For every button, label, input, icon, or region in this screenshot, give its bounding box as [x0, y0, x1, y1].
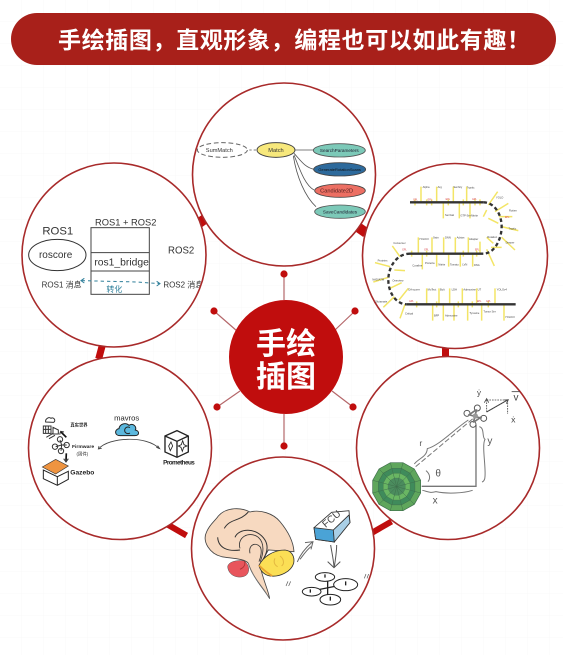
panel: drone tracking geometry sketch [356, 356, 540, 540]
pathway labels: Rotation [487, 235, 498, 239]
pathway labels: BFP [434, 314, 439, 318]
bridge stack: ROS1 + ROS2 [95, 217, 156, 227]
red markers: EPL [428, 200, 433, 202]
central hub: hand-drawn illustrations [229, 300, 343, 414]
red markers: EPL [477, 301, 482, 303]
yellow label ticks [373, 187, 518, 321]
flow arrows [249, 150, 316, 207]
Gazebo box [42, 459, 94, 485]
pathway labels: Deeper [506, 240, 514, 244]
pathway labels: Ser/Gly [453, 185, 463, 189]
mavros cloud: mavros [114, 413, 139, 422]
red markers: EPL [409, 301, 414, 303]
central hub: hand-drawn illustrations: 插图 [256, 361, 316, 394]
excitement marks [286, 574, 369, 586]
node: SumMatch [197, 143, 247, 157]
panel: serpentine pathway diagram [362, 164, 548, 348]
arrow to drone [328, 545, 340, 568]
pathway labels: Swin [433, 236, 439, 240]
red markers: EPL [486, 301, 491, 303]
Prometheus cube [163, 431, 195, 467]
node: Match [257, 143, 295, 157]
pathway labels: Overview [392, 279, 403, 283]
central hub: hand-drawn illustrations: 手绘 [256, 328, 316, 361]
pathway labels: Glutamate [375, 300, 388, 304]
node: Match: Match [268, 148, 284, 154]
ROS2 label: ROS2 [168, 245, 194, 256]
Firmware label: (固件) [77, 450, 89, 457]
panel: ROS1 and ROS2 bridge sketch [22, 163, 206, 347]
red markers: EPL [402, 250, 407, 252]
message conversion arrow [42, 278, 203, 294]
bridge stack [91, 217, 156, 294]
pathway labels: Nitrite [471, 214, 478, 218]
red markers: EPL [475, 250, 480, 252]
green wheel target [373, 463, 421, 511]
hub spokes and dots [210, 270, 359, 450]
ROS1 roscore bubble: roscore [39, 250, 73, 261]
panel: mavros simulation sketch [28, 356, 212, 540]
pathway labels: LDH [452, 287, 457, 291]
pathway labels: Adrian [457, 236, 465, 240]
bridge stack: ros1_bridge [94, 257, 149, 268]
red markers [402, 199, 510, 303]
geometry labels [419, 436, 492, 506]
real world sketch [43, 418, 88, 439]
red markers: EPL [472, 199, 477, 201]
node: SaveCandidates [315, 205, 365, 218]
pathway labels: Proteins [425, 261, 435, 265]
title banner: 手绘插图，直观形象，编程也可以如此有趣！ [58, 27, 530, 53]
pathway labels: LVN [462, 262, 467, 266]
mavros cloud [114, 413, 139, 436]
pathway labels: Dif-scorer [408, 287, 420, 291]
pathway labels: YOLO/3 [419, 237, 429, 241]
title banner [11, 13, 556, 65]
pathway labels: Ser/Gal [445, 213, 454, 217]
pathway labels: Bolt [440, 287, 445, 291]
pathway labels: YOLO [496, 195, 503, 199]
pathway labels: Consumer [393, 241, 406, 245]
panel: brain to drone sketch [192, 457, 374, 640]
pathway labels: Adenosine [463, 287, 476, 291]
pathway labels [372, 185, 517, 319]
node: SaveCandidates: SaveCandidates [323, 209, 358, 214]
panel: SumMatch flow diagram [192, 83, 376, 266]
node: SumMatch: SumMatch [206, 148, 233, 154]
ROS1 roscore bubble [29, 226, 86, 271]
message conversion arrow: ROS2 消息 [163, 279, 203, 289]
ROS1 roscore bubble: ROS1 [42, 226, 73, 238]
pathway labels: UT [478, 287, 482, 291]
FCU block [314, 509, 350, 542]
cerebellum [228, 561, 249, 577]
pathway labels: Critical [405, 311, 414, 315]
connector bars between circles [95, 214, 449, 538]
pathway labels: NAD/ATM [372, 277, 384, 281]
pathway labels: Tryptic [467, 186, 475, 190]
message conversion arrow: 转化 [106, 284, 122, 294]
pathway labels: MuTect [428, 287, 436, 291]
geometry labels: x [433, 495, 438, 506]
pathway labels: Alpha [423, 185, 430, 189]
pathway labels: Tyrosine [469, 311, 480, 315]
geometry labels: y [487, 436, 492, 447]
node: Candidate2D: Candidate2D [320, 189, 353, 195]
drone with velocity vectors: ẋ [511, 415, 516, 425]
pathway labels: Tumor Ser [483, 310, 496, 314]
pathway labels: Adenosine [445, 314, 458, 318]
node: Candidate2D [315, 184, 365, 197]
drone sketch [302, 573, 358, 605]
Firmware label [72, 444, 94, 457]
Prometheus cube: Prometheus [163, 460, 195, 467]
Gazebo box: Gazebo [70, 470, 94, 477]
pathway labels: GTP-Ser [460, 214, 471, 218]
pathway labels: Nitrite [438, 262, 446, 266]
node: GenerateRotationScans: GenerateRotationScans [318, 167, 361, 172]
pathway line [388, 202, 516, 304]
brain [205, 509, 294, 599]
yellow brain region [259, 550, 294, 576]
triangle and braces [414, 418, 485, 493]
drone with velocity vectors: ẏ [477, 388, 481, 397]
FCU block: FCU [321, 509, 343, 530]
arrow to FCU [297, 542, 313, 562]
node: SearchParameters: SearchParameters [320, 148, 359, 153]
link arcs [98, 439, 160, 449]
quadrotor [52, 431, 69, 462]
pathway labels: Arg [438, 185, 442, 189]
drone with velocity vectors: v [513, 393, 518, 404]
pathway labels: DNA [474, 263, 480, 267]
pathway labels: Adapter [469, 237, 478, 241]
red markers: EPL [424, 250, 429, 252]
pathway labels: Proteins [378, 258, 388, 262]
pathway labels: Tomato [450, 262, 459, 266]
red markers: EPL [446, 199, 451, 201]
red markers: EPL [505, 217, 510, 219]
real world sketch: 真实世界 [70, 422, 88, 429]
pathway labels: Coraline [412, 264, 423, 268]
red markers: EPL [413, 200, 418, 202]
pathway labels: Rotten [509, 208, 517, 212]
pathway labels: Tryptic [508, 226, 517, 230]
Firmware label: Firmware [72, 444, 94, 450]
message conversion arrow: ROS1 消息 [42, 279, 82, 289]
drone with velocity vectors [464, 388, 520, 427]
geometry labels: r [419, 438, 422, 448]
pathway labels: DNN [445, 236, 451, 240]
node: GenerateRotationScans [314, 163, 366, 176]
pathway labels: YOLOv4 [497, 287, 507, 291]
pathway labels: YOLO/3 [505, 315, 515, 319]
node: SearchParameters [313, 144, 365, 157]
geometry labels: θ [435, 469, 441, 480]
